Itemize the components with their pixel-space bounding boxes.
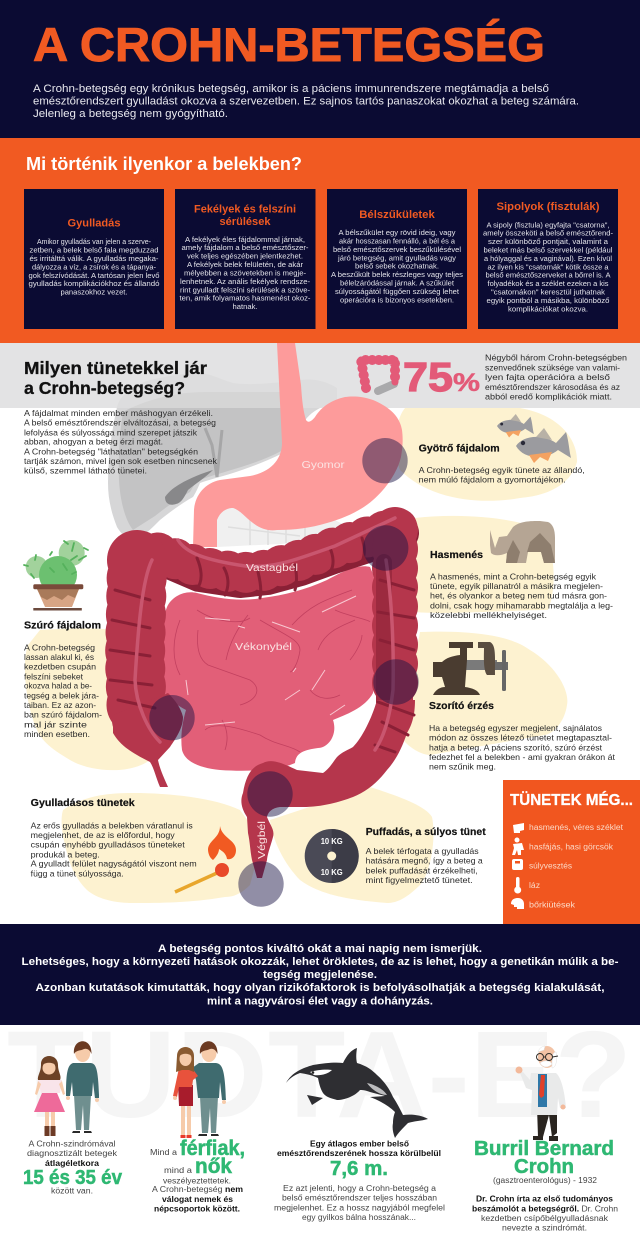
fact: men and women: A Crohn-betegség nem — [152, 1185, 243, 1194]
panel: more symptoms: TÜNETEK MÉG... — [510, 790, 633, 809]
fact: men and women — [150, 1137, 245, 1214]
card: Sipolyok: A sipoly (fisztula) egyfajta "csatorna", — [486, 222, 610, 229]
heading: Mi történik ilyenkor a belekben? — [26, 153, 302, 174]
fact: Burril Bernard Crohn: Dr. Crohn írta az első tudományos — [476, 1195, 614, 1204]
symptom: Hasmenés: A hasmenés, mint a Crohn-betegség egyik — [430, 571, 597, 581]
panel: causes: Lehetséges, hogy a környezeti hatások okozzák, lehet örökletes, de az is lehet, hogy a genetikán múlik a be- — [22, 956, 619, 968]
symptom: Hasmenés: Hasmenés — [430, 549, 483, 561]
fact: men and women: mind a — [164, 1166, 193, 1175]
symptom: Szorító érzés: fedezhet fel a belekben - ami gyakran órákon át — [429, 752, 616, 762]
symptom: Gyulladásos tünetek: függ a tünet súlyossága. — [31, 868, 124, 878]
heading: symptoms — [24, 358, 207, 398]
symptom: Puffadás: Puffadás, a súlyos tünet — [366, 826, 486, 838]
pain marker circles — [149, 438, 419, 907]
text block: 75% explanation: abból eredő komplikációk miatt. — [485, 391, 612, 401]
card: Sipolyok: beleket más belső szervekkel (például — [484, 248, 613, 255]
stat: 75% — [403, 354, 480, 400]
panel: causes: A betegség pontos kiváltó okát a mai napig nem ismerjük. — [158, 943, 482, 955]
fact: men and women: válogat nemek és — [162, 1195, 234, 1204]
panel: causes: mint a nagyvárosi élet vagy a dohányzás. — [207, 996, 433, 1008]
card: Fekélyek: vek teljes egészében jelentkezhet. — [187, 254, 303, 261]
icon: piranhas — [497, 414, 571, 463]
caecum and appendix — [113, 693, 183, 787]
organ labels: Vékonybél — [235, 642, 292, 653]
card: Bélszűkületek: Bélszűkületek — [359, 209, 436, 221]
symptom: Szúró fájdalom: ban szúró fájdalom- — [24, 710, 102, 720]
text block: pain description: tartják számon, mivel igen sok esetben nincsenek — [24, 456, 218, 466]
stat: 75%: % — [453, 369, 480, 397]
symptom: Szorító érzés: módon az összes létező tünetet megtapasztal- — [429, 733, 612, 743]
card: Fekélyek — [175, 189, 316, 329]
card: Gyulladás: és irritálttá válik. A gyulladás megaka- — [30, 256, 159, 263]
symptom: Szorító érzés: hatja a beteg. A páciens szorító, szúró érzést — [429, 742, 603, 752]
text block: pain description: A Crohn-betegség "láthatatlan" betegségkén — [24, 446, 198, 456]
icon: toilet paper — [513, 823, 524, 833]
fact: age range: 15 és 35 év — [23, 1167, 123, 1189]
card: Bélszűkületek — [327, 189, 467, 329]
card: Sipolyok: komplikációkat okozva. — [508, 306, 588, 313]
sigmoid and rectum — [241, 700, 415, 878]
colon body: ascending, transverse and descending — [135, 526, 400, 720]
translucent band over liver — [100, 343, 345, 408]
symptom: Hasmenés: het, és olyankor a beteg nem tud másra gon- — [430, 591, 607, 601]
fact: age range: között van. — [51, 1186, 93, 1195]
fact: digestive tract length — [274, 1140, 445, 1222]
fact: digestive tract length: Egy átlagos ember belső — [310, 1140, 409, 1149]
icon: intestine — [361, 360, 395, 391]
fact: Burril Bernard Crohn — [472, 1138, 618, 1233]
background word: TUDTA-E?: TUDTA-E? — [7, 1007, 632, 1144]
panel: what happens in the bowels — [0, 138, 640, 343]
card: Sipolyok: belső emésztőszerveket a bőrrel is. A — [486, 273, 611, 280]
card: Fekélyek: lenhetnek. Az anális fekélyek rendsze- — [180, 279, 311, 286]
illustration: liver and gall bladder — [108, 373, 337, 537]
symptom: Puffadás: hatására megnő, így a beteg a — [366, 856, 483, 866]
fact: digestive tract length: 7,6 m. — [330, 1158, 388, 1180]
symptom: Gyötrő fájdalom: Gyötrő fájdalom — [419, 443, 500, 455]
intro text: emésztőrendszert gyulladást okozva a szervezetben. Ez sajnos tartós panaszokat okozhat a beteg számára. — [33, 96, 579, 108]
fact: Burril Bernard Crohn: beszámolót a betegségről. Dr. Crohn — [472, 1204, 618, 1213]
symptom: Szúró fájdalom: taiban. Ez az azon- — [24, 700, 96, 710]
fact: digestive tract length: belső emésztőrendszer teljes hosszában — [282, 1194, 437, 1203]
fact: men and women: nők — [195, 1155, 232, 1178]
panel: more symptoms — [503, 780, 640, 924]
icon: person with stomach ache — [512, 838, 524, 855]
text block: pain description: A fájdalmat minden ember máshogyan érzékeli. — [24, 408, 213, 418]
fact: Burril Bernard Crohn: Burril Bernard — [474, 1138, 614, 1160]
icon: scale — [512, 859, 523, 870]
card: Bélszűkületek: operációra is bizonyos esetekben. — [340, 297, 454, 304]
panel: causes — [0, 924, 640, 1025]
heading: symptoms: Milyen tünetekkel jár — [24, 358, 207, 378]
text block: 75% explanation: lyen fajta operációra a belső — [485, 372, 610, 382]
card: Sipolyok: a hólyaggal és a vaginával). Ezen kívül — [484, 256, 612, 263]
fact: digestive tract length: emésztőrendszerének hossza körülbelül — [277, 1149, 441, 1158]
text block: 75% explanation: emésztőrendszer károsodása és az — [485, 382, 620, 392]
panel: causes: tegség megjelenése. — [263, 969, 377, 981]
card: Fekélyek: Fekélyek és felszíni — [194, 204, 296, 216]
fact: Burril Bernard Crohn: Crohn — [514, 1156, 574, 1178]
icon: weight plate: 10 KG — [321, 837, 343, 846]
illustration: doctor — [516, 1046, 566, 1141]
symptom: Hasmenés: közelebbi mellékhelyiséget. — [430, 610, 547, 620]
heading: symptoms: a Crohn-betegség? — [24, 378, 185, 398]
symptom: Gyulladásos tünetek: megjelenhet, de az is előfordul, hogy — [31, 830, 176, 840]
text block: pain description: abban, ahogyan a beteg érzi magát. — [24, 437, 163, 447]
symptom: Hasmenés — [430, 549, 613, 620]
organ labels: Gyomor — [302, 460, 345, 471]
panel: more symptoms: súlyvesztés — [529, 862, 572, 871]
fact: age range: A Crohn-szindrómával — [28, 1140, 116, 1149]
symptom: Hasmenés: dolni, csak hogy mihamarabb megtalálja a leg- — [430, 600, 613, 610]
symptom: Gyötrő fájdalom: nem múló fájdalom a gyomortájékon. — [419, 475, 566, 485]
symptom: Szúró fájdalom: kezdetben csupán — [24, 662, 96, 672]
card: Gyulladás: Gyulladás — [68, 218, 120, 230]
panel: causes: Azonban kutatások kimutatták, hogy olyan rizikófaktorok is befolyásolhatják a betegség kialakulását, — [36, 982, 604, 994]
icon: rhino — [490, 521, 555, 563]
symptom: Gyulladásos tünetek: Gyulladásos tünetek — [31, 797, 135, 809]
fact: Burril Bernard Crohn: (gasztroenterológus) - 1932 — [493, 1176, 597, 1185]
icon: vise — [433, 642, 508, 695]
fact: men and women: férfiak, — [180, 1137, 245, 1160]
card: Gyulladás: Amikor gyulladás van jelen a szerve- — [37, 239, 152, 246]
card: Gyulladás: panaszokhoz vezet. — [60, 290, 128, 296]
fact: Burril Bernard Crohn: kezdetben csípőbélgyulladásnak — [481, 1214, 608, 1223]
symptom: Gyulladásos tünetek: produkál a beteg. — [31, 849, 100, 859]
panel: more symptoms: hasmenés, véres széklet — [529, 823, 624, 832]
organ labels: Vastagbél — [246, 563, 298, 574]
organ labels — [235, 460, 345, 859]
card: Fekélyek: rint gyulladt felszíni sérülések a szöve- — [180, 287, 311, 294]
card: Fekélyek: A fekélyek belek felületén, de akár — [187, 262, 304, 269]
text block: 75% explanation: szenvedőnek szüksége van valami- — [485, 363, 620, 373]
text block: pain description: A belső emésztőrendszer elváltozásai, a betegség — [24, 417, 216, 427]
card: Sipolyok: amely összeköti a belső emésztőrend- — [483, 231, 614, 238]
symptom: Hasmenés: tünete, egyik pillanatról a másikra megjelen- — [430, 581, 603, 591]
text block: pain description — [24, 408, 218, 475]
card: Bélszűkületek: bélelzáródással járnak. A szűkület — [340, 281, 454, 288]
fact: men and women: veszélyeztettetek. — [163, 1176, 231, 1185]
card: Fekélyek: ten, amik folyamatos hasmenést okoz- — [180, 296, 311, 303]
grey symptom header band — [0, 343, 640, 408]
symptom: Gyötrő fájdalom: A Crohn-betegség egyik tünete az állandó, — [419, 465, 585, 475]
card: Gyulladás — [24, 189, 164, 329]
fact: digestive tract length: egy gyilkos bálna hosszának... — [302, 1213, 416, 1222]
panel: header — [0, 0, 640, 138]
card: Fekélyek: sérülések — [220, 216, 271, 228]
card: Sipolyok: szer különböző pontjait, valamint a — [488, 239, 608, 246]
colon light bands — [135, 518, 395, 750]
symptom: Puffadás — [366, 826, 486, 885]
panel: more symptoms: láz — [529, 881, 540, 890]
symptom: Gyulladásos tünetek: csupán enyhébb gyulladásos tüneteket — [31, 840, 185, 850]
symptom: Szúró fájdalom: okozva halad a be- — [24, 681, 92, 691]
card: Sipolyok: az ilyen kis "csatornák" kötik össze a — [488, 264, 609, 271]
symptom: Szúró fájdalom: mal jár szinte — [24, 719, 87, 729]
icon: weight plate: 10 KG — [321, 868, 343, 877]
illustration: stomach — [193, 343, 403, 547]
intro text: Jelenleg a betegség nem gyógyítható. — [33, 108, 228, 120]
title: A CROHN-BETEGSÉG — [33, 18, 545, 71]
text block: pain description: lefolyása és súlyossága mind szerepet játszik — [24, 427, 198, 437]
icon: thermometer — [514, 877, 521, 894]
fact: Burril Bernard Crohn: nevezte a szindrómát. — [502, 1224, 587, 1233]
symptom: Szúró fájdalom: Szúró fájdalom — [24, 620, 101, 632]
symptom: Szúró fájdalom: tegség a belek jára- — [24, 690, 99, 700]
symptom: Szorító érzés: nem szűnik meg. — [429, 762, 496, 772]
symptom: Szorító érzés — [429, 700, 616, 772]
colon haustra folds — [110, 538, 414, 752]
fact: digestive tract length: megjelenhet. Ez a hossz nagyjából megfelel — [274, 1203, 445, 1212]
illustration: girl and man — [34, 1041, 99, 1136]
symptom: Gyötrő fájdalom — [419, 443, 585, 485]
organ labels: Végbél — [257, 821, 268, 859]
symptom: Puffadás: belek puffadását érzékelheti, — [366, 865, 478, 875]
symptom: Szúró fájdalom: lassan alakul ki, és — [24, 652, 94, 662]
fact: digestive tract length: Ez azt jelenti, hogy a Crohn-betegség a — [283, 1184, 437, 1193]
card: Bélszűkületek: A bélszűkület egy rövid ideig, vagy — [338, 230, 456, 237]
icon: burning match — [175, 826, 236, 892]
card: Gyulladás: gok felszívódását. A tartósan jelen levő — [28, 273, 160, 280]
symptom: Puffadás: mint figyelmeztető tünetet. — [366, 875, 473, 885]
card: Gyulladás: gyulladás komplikációkhoz és állandó — [28, 281, 160, 288]
card: Sipolyok: "csatornákon" keresztül juthatnak — [491, 290, 606, 297]
symptom: Szúró fájdalom: felszíni sebeket — [24, 671, 84, 681]
symptom: Gyulladásos tünetek — [31, 797, 197, 878]
card: Fekélyek: amely fájdalom a belső emésztőszer- — [182, 245, 309, 252]
panel: more symptoms: hasfájás, hasi görcsök — [529, 842, 614, 851]
text block: 75% explanation: Négyből három Crohn-betegségben — [485, 353, 627, 363]
illustration: woman and man — [173, 1041, 226, 1138]
card: Fekélyek: hatnak. — [232, 304, 258, 311]
card: Sipolyok — [478, 189, 618, 329]
symptom: Szorító érzés: Ha a betegség egyszer megjelent, sajnálatos — [429, 723, 602, 733]
fact: men and women: népcsoportok között. — [154, 1205, 240, 1214]
fact: age range — [23, 1140, 123, 1195]
symptom: Gyulladásos tünetek: Az erős gyulladás a belekben váratlanul is — [31, 820, 193, 830]
panel: more symptoms: bőrkiütések — [529, 900, 576, 909]
fact: age range: diagnosztizált betegek — [27, 1149, 117, 1158]
card: Fekélyek: mélyebben a szövetekben is megje- — [184, 271, 307, 278]
icon: head — [511, 898, 524, 909]
stat: 75%: 75 — [403, 354, 453, 400]
symptom: Puffadás: A belek térfogata a gyulladás — [366, 846, 479, 856]
card: Sipolyok: Sipolyok (fisztulák) — [496, 201, 600, 213]
card: Bélszűkületek: súlyosságától függően szükség lehet — [335, 289, 459, 296]
colon shadow layer — [135, 533, 400, 720]
yellow background blobs — [25, 408, 577, 903]
card: Bélszűkületek: belső sebek okozhatnak. — [355, 264, 439, 271]
text block: pain description: külső, szemmel látható tünetei. — [24, 465, 147, 475]
illustration: large intestine — [110, 518, 415, 878]
symptom: Gyulladásos tünetek: A gyulladt felület nagyságától viszont nem — [31, 859, 197, 869]
symptom: Szorító érzés: Szorító érzés — [429, 700, 494, 712]
card: Sipolyok: egyik pontból a másikba, különböző — [486, 298, 610, 305]
symptom: Szúró fájdalom: A Crohn-betegség — [24, 643, 95, 653]
card: Gyulladás: dályozza a víz, a zsírok és a tápanya- — [32, 264, 157, 272]
card: Gyulladás: zetben, a belek belső fala megduzzad — [30, 248, 159, 254]
card: Fekélyek: A fekélyek éles fájdalommal járnak, — [185, 237, 305, 244]
symptom: Szúró fájdalom — [24, 620, 102, 739]
card: Bélszűkületek: belső emésztőszervek beszűkülésével — [333, 247, 461, 254]
illustration: orca — [286, 1048, 428, 1138]
card: Sipolyok: folyadékok és a széklet ezeken a kis — [488, 281, 609, 288]
symptom: Szúró fájdalom: minden esetben. — [24, 729, 90, 739]
card: Bélszűkületek: A beszűkült belek részleges vagy teljes — [331, 272, 464, 279]
illustration: small intestine — [159, 566, 377, 771]
intro text: A Crohn-betegség egy krónikus betegség, amikor is a páciens immunrendszere megtámadja a belső — [33, 83, 549, 95]
card: Bélszűkületek: járó betegség, amit gyulladás vagy — [337, 255, 457, 262]
card: Bélszűkületek: akár hosszasan fennálló, a bél és a — [339, 239, 455, 246]
text block: 75% explanation — [485, 353, 627, 401]
intro text — [33, 83, 579, 120]
icon: weight plate — [305, 829, 359, 883]
illustration: pancreas and ribs — [217, 507, 350, 547]
fact: age range: átlagéletkora — [45, 1159, 100, 1168]
fact: men and women: Mind a — [150, 1148, 178, 1157]
icon: cactus — [24, 540, 88, 610]
